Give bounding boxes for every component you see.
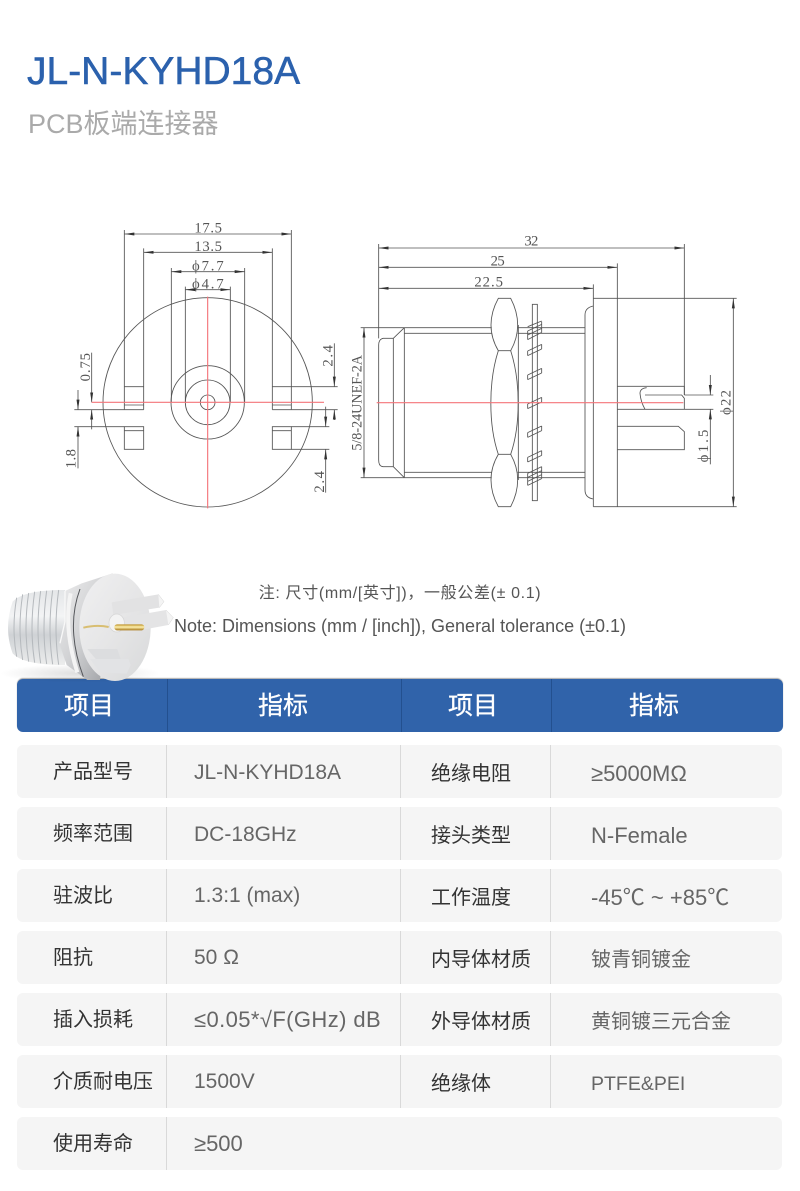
center insulator <box>109 614 124 632</box>
table row 1: 绝缘电阻 <box>431 763 511 785</box>
note: chinese dimensions: 注: 尺寸(mm/[英寸])，一般公差(± 0.1) <box>259 585 541 602</box>
diagram: side view drawing: 22.5 <box>474 275 503 291</box>
table header: 项目 <box>448 692 498 720</box>
diagram: side view drawing <box>349 234 737 508</box>
table row 4: 铍青铜镀金 <box>591 949 691 971</box>
table row 2: N-Female <box>591 823 688 848</box>
table row 1: JL-N-KYHD18A <box>194 761 341 784</box>
table row 6: 绝缘体 <box>431 1073 491 1095</box>
contact blades <box>112 594 164 615</box>
table row 2: 频率范围 <box>53 823 133 845</box>
table row 6: PTFE&PEI <box>591 1073 685 1095</box>
table row 6: 1500V <box>194 1070 255 1093</box>
table row 2: 接头类型 <box>431 825 511 847</box>
table row 4: 50 Ω <box>194 946 239 969</box>
table row 2 <box>17 807 782 860</box>
table row 4 <box>17 931 782 984</box>
gold pin <box>114 624 144 630</box>
table row 5: 外导体材质 <box>431 1011 531 1033</box>
head disc <box>79 574 151 681</box>
note: english dimensions: Note: Dimensions (mm / [inch]), General tolerance (±0.1) <box>174 616 626 636</box>
diagram: side view drawing: 5/8-24UNEF-2A <box>349 355 365 451</box>
diagram: side view drawing: 25 <box>491 254 505 270</box>
diagram: front view drawing: ϕ7.7 <box>192 258 224 274</box>
table row 1 <box>17 745 782 798</box>
table row 1: 产品型号 <box>53 761 133 783</box>
subtitle: PCB板端连接器 <box>28 109 219 139</box>
table header: 项目 <box>64 692 114 720</box>
table row 7: 使用寿命 <box>53 1133 133 1155</box>
table row 5: 黄铜镀三元合金 <box>591 1011 731 1033</box>
icon: connector photo <box>8 574 174 681</box>
diagram: front view drawing: 2.4 <box>321 344 337 367</box>
diagram: front view drawing: 17.5 <box>194 221 222 237</box>
table row 4: 内导体材质 <box>431 949 531 971</box>
diagram: front view drawing: 0.75 <box>78 353 94 381</box>
diagram: front view drawing: 2.4 <box>312 470 328 493</box>
table row 4: 阻抗 <box>53 947 93 969</box>
table header <box>17 679 783 732</box>
table row 1: ≥5000MΩ <box>591 761 687 786</box>
table row 2: DC-18GHz <box>194 823 297 846</box>
shadow <box>0 664 160 683</box>
table row 3: 驻波比 <box>53 885 113 907</box>
table row 5 <box>17 993 782 1046</box>
diagram: front view drawing: 1.8 <box>64 449 80 468</box>
hex nut and flange <box>59 573 113 680</box>
diagram: front view drawing: ϕ4.7 <box>192 277 224 293</box>
table row 3 <box>17 869 782 922</box>
table row 3: -45℃ ~ +85℃ <box>591 885 729 910</box>
diagram: side view drawing: 32 <box>524 234 538 250</box>
table header: 指标 <box>629 692 679 720</box>
table row 3: 工作温度 <box>431 887 511 909</box>
table header: 指标 <box>258 692 308 720</box>
table row 3: 1.3:1 (max) <box>194 884 300 907</box>
table row 6 <box>17 1055 782 1108</box>
table row 7: ≥500 <box>194 1131 243 1156</box>
table row 5: 插入损耗 <box>53 1009 133 1031</box>
title: JL-N-KYHD18A <box>27 50 300 93</box>
diagram: front view drawing: 13.5 <box>194 239 222 255</box>
diagram: side view drawing: ϕ22 <box>719 390 735 415</box>
table row 5: ≤0.05*√F(GHz) dB <box>194 1007 381 1032</box>
diagram: side view drawing: ϕ1.5 <box>696 430 712 462</box>
table row 7 <box>17 1117 782 1170</box>
threaded barrel <box>8 590 65 665</box>
table row 6: 介质耐电压 <box>53 1071 153 1093</box>
diagram: front view drawing <box>64 221 338 508</box>
